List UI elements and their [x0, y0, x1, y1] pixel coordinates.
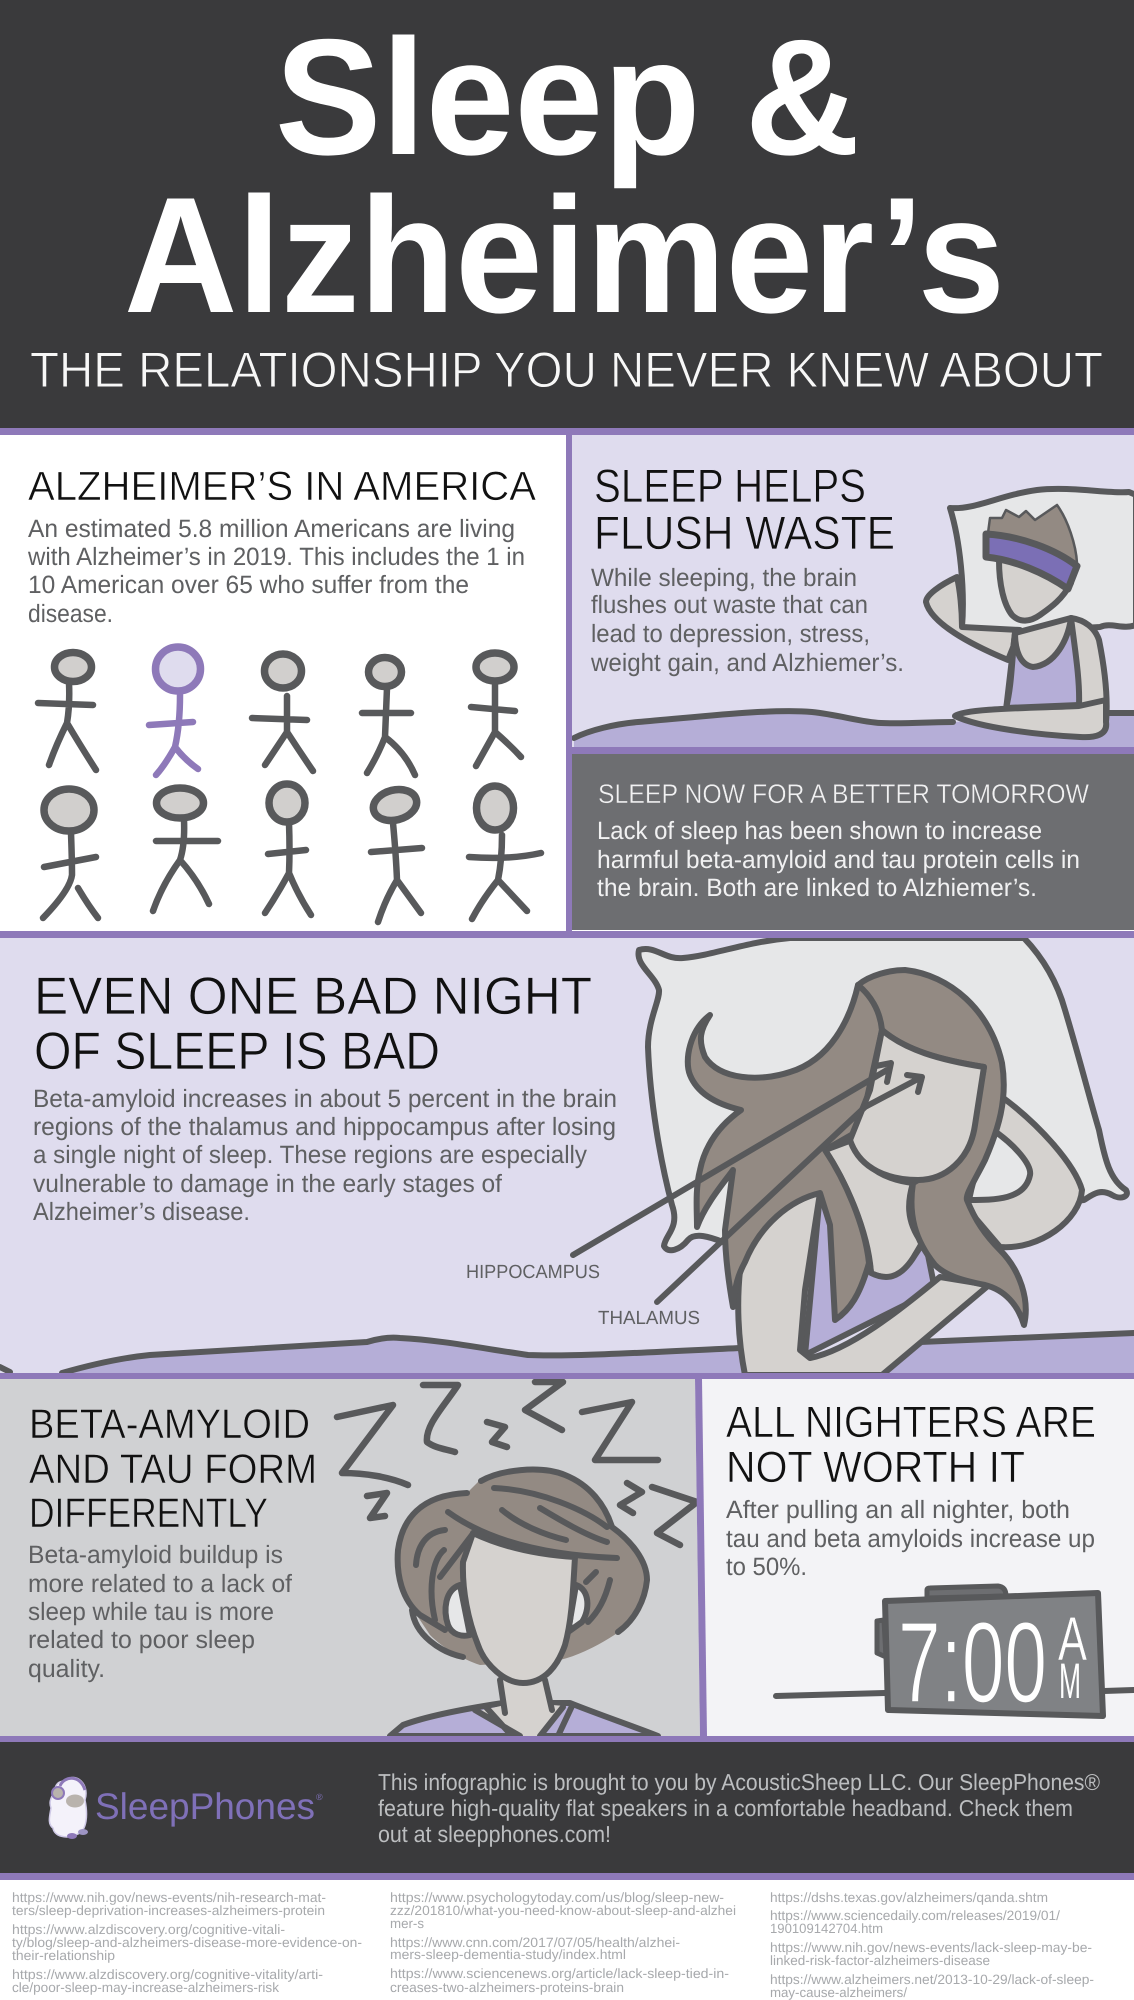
face: [850, 1030, 984, 1180]
text: buildup differences: more related to a lack of: [28, 1570, 292, 1598]
reference column 1: [12, 1890, 362, 1995]
text: beta-amyloid and tau: harmful beta-amyloid and tau protein cells in: [597, 846, 1080, 874]
heading: all nighters: NOT WORTH IT: [726, 1443, 1025, 1492]
figure 3: [252, 654, 313, 771]
figure 8: [265, 784, 311, 915]
text: all nighter increase: to 50%.: [726, 1553, 807, 1581]
illustration: sleepy woman with short hair: [390, 1470, 658, 1736]
text: waste flushing: lead to depression, stress,: [591, 620, 870, 648]
icon: ten stick figures, one in ten highlighted: [38, 647, 541, 922]
heading: even one bad night: [34, 967, 592, 1081]
panel: even one bad night: [0, 938, 1134, 1375]
clock time: A: [1058, 1605, 1087, 1674]
logo: SleepPhones sheep: [49, 1777, 88, 1839]
figure 2: highlighted purple: [149, 647, 200, 775]
panel: all nighters: [701, 1379, 1134, 1736]
icon: alarm clock: [776, 1586, 1134, 1727]
title: Sleep &: [275, 5, 860, 189]
reference column 2: https://www.sciencenews.org/article/lack-sleep-tied-in-: [390, 1966, 729, 1981]
text: beta-amyloid and tau: Lack of sleep has been shown to increase: [597, 817, 1042, 845]
heading: all nighters: [726, 1398, 1096, 1492]
text: sponsor message: [378, 1769, 1100, 1847]
title: Alzheimer’s: [124, 163, 1005, 347]
text: Alzheimer's statistic: 10 American over 65 who suffer from the: [28, 571, 469, 599]
reference column 1: https://www.nih.gov/news-events/nih-research-mat-: [12, 1890, 326, 1905]
reference column 3: may-cause-alzheimers/: [770, 1985, 907, 2000]
figure 1: [38, 652, 96, 770]
heading: sleep helps flush waste: SLEEP HELPS: [594, 459, 866, 512]
header panel: [0, 0, 1134, 429]
reference column 3: https://www.alzheimers.net/2013-10-29/lack-of-sleep-: [770, 1972, 1094, 1987]
shirt: [390, 1703, 658, 1736]
text: beta-amyloid and tau: the brain. Both are linked to Alzhiemer’s.: [597, 874, 1037, 902]
reference column 3: https://www.nih.gov/news-events/lack-sleep-may-be-: [770, 1940, 1092, 1955]
reference column 2: mers-sleep-dementia-study/index.html: [390, 1947, 626, 1962]
text: beta-amyloid increase: Beta-amyloid increases in about 5 percent in the brain: [33, 1085, 617, 1113]
illustration: sleeping woman with long hair: [573, 938, 1127, 1375]
arrow: hippocampus: [573, 1063, 891, 1255]
figure 9: [370, 785, 422, 922]
reference column 1: https://www.alzdiscovery.org/cognitive-vitali-: [12, 1922, 285, 1937]
arrow: thalamus: [657, 1075, 922, 1302]
reference column 1: cle/poor-sleep-may-increase-alzheimers-risk: [12, 1980, 279, 1995]
reference column 3: [770, 1890, 1094, 2000]
text: buildup differences: quality.: [28, 1655, 105, 1683]
figure 10: [469, 786, 541, 919]
text: sponsor message: feature high-quality flat speakers in a comfortable headband. Check them: [378, 1795, 1073, 1821]
hair: [398, 1470, 647, 1665]
text: all nighter increase: tau and beta amyloids increase up: [726, 1525, 1095, 1553]
reference column 1: ty/blog/sleep-and-alzheimers-disease-more-evidence-on-: [12, 1935, 362, 1950]
text: waste flushing: weight gain, and Alzhiemer’s.: [590, 649, 904, 677]
text: beta-amyloid increase: a single night of sleep. These regions are especially: [33, 1141, 587, 1169]
reference column 2: https://www.psychologytoday.com/us/blog/sleep-new-: [390, 1890, 724, 1905]
tank top: [1006, 618, 1079, 708]
reference column 3: https://dshs.texas.gov/alzheimers/qanda.shtm: [770, 1890, 1048, 1905]
reference column 1: https://www.alzdiscovery.org/cognitive-vitality/arti-: [12, 1967, 323, 1982]
heading: beta-amyloid and tau: DIFFERENTLY: [29, 1489, 268, 1536]
forearm: [955, 700, 1106, 737]
reference column 3: 190109142704.htm: [770, 1921, 883, 1936]
figure 4: [362, 658, 415, 775]
raised arm: [926, 577, 1020, 660]
text: waste flushing: While sleeping, the brain: [591, 564, 857, 592]
figure 7: [153, 788, 218, 911]
blanket: [12, 1333, 1134, 1373]
heading: beta-amyloid and tau: [29, 1400, 317, 1536]
text: buildup differences: Beta-amyloid buildup is: [28, 1541, 283, 1569]
reference column 3: https://www.sciencedaily.com/releases/2019/01/: [770, 1908, 1060, 1923]
panel: Alzheimer's in America: [0, 435, 566, 932]
face: [463, 1533, 575, 1683]
text: Alzheimer's statistic: disease.: [28, 600, 113, 628]
face: [999, 550, 1071, 621]
label: hippocampus: HIPPOCAMPUS: [466, 1262, 600, 1283]
hair strands: [416, 1488, 617, 1622]
reference column 2: zzz/201810/what-you-need-know-about-sleep-and-alzhei: [390, 1903, 736, 1918]
heading: all nighters: ALL NIGHTERS ARE: [726, 1398, 1096, 1447]
icon: Z letters: [337, 1382, 697, 1545]
reference column 3: linked-risk-factor-alzheimers-disease: [770, 1953, 990, 1968]
blanket: [574, 711, 1134, 747]
heading: sleep now: SLEEP NOW FOR A BETTER TOMORROW: [598, 779, 1089, 809]
text: beta-amyloid increase: vulnerable to damage in the early stages of: [33, 1170, 502, 1198]
label: thalamus: THALAMUS: [598, 1308, 700, 1329]
hair: [988, 505, 1077, 563]
text: buildup differences: [28, 1541, 292, 1683]
right hair: [858, 970, 1026, 1325]
text: buildup differences: related to poor sleep: [28, 1626, 255, 1654]
reference column 1: their-relationship: [12, 1948, 115, 1963]
left hair: [688, 985, 882, 1320]
text: all nighter increase: After pulling an all nighter, both: [726, 1496, 1070, 1524]
clock time: M: [1059, 1653, 1081, 1709]
top: [805, 1190, 935, 1355]
heading: even one bad night: EVEN ONE BAD NIGHT: [34, 967, 592, 1026]
pillow: [638, 938, 1127, 1250]
torso: [1006, 618, 1107, 730]
pillow: [950, 489, 1134, 632]
arm behind head: [960, 1097, 1082, 1247]
clock time: 7:00: [898, 1599, 1047, 1727]
text: Alzheimer's statistic: An estimated 5.8 million Americans are living: [28, 515, 515, 543]
panel: sleep now for a better tomorrow: [572, 754, 1134, 930]
heading: sleep helps flush waste: FLUSH WASTE: [594, 506, 895, 559]
panel: sleep helps flush waste: [572, 435, 1134, 747]
text: beta-amyloid increase: Alzheimer’s disease.: [33, 1198, 250, 1226]
text: Alzheimer's statistic: [27, 515, 525, 628]
illustration: sleeping man with headband: [574, 489, 1134, 747]
text: beta-amyloid increase: [33, 1085, 617, 1226]
title: [124, 5, 1005, 347]
reference column 1: ters/sleep-deprivation-increases-alzheimers-protein: [12, 1903, 325, 1918]
heading: beta-amyloid and tau: BETA-AMYLOID: [29, 1400, 310, 1447]
text: waste flushing: flushes out waste that can: [591, 591, 868, 619]
figure 5: [471, 653, 521, 766]
reference column 2: [390, 1890, 736, 1995]
figure 6: [43, 789, 98, 918]
neck: [475, 1675, 565, 1736]
text: beta-amyloid and tau: [597, 817, 1080, 902]
panel: beta-amyloid and tau: [0, 1379, 700, 1736]
subtitle: THE RELATIONSHIP YOU NEVER KNEW ABOUT: [30, 342, 1103, 398]
ears: [446, 1585, 470, 1636]
heading: Alzheimer's in America: ALZHEIMER’S IN AMERICA: [28, 463, 537, 509]
registered mark: ®: [316, 1792, 323, 1802]
text: beta-amyloid increase: regions of the thalamus and hippocampus after losing: [33, 1113, 616, 1141]
reference column 2: creases-two-alzheimers-proteins-brain: [390, 1980, 624, 1995]
heading: beta-amyloid and tau: AND TAU FORM: [29, 1445, 317, 1492]
text: Alzheimer's statistic: with Alzheimer’s in 2019. This includes the 1 in: [27, 543, 525, 571]
headband: [986, 534, 1077, 589]
front arm: [738, 1193, 989, 1375]
heading: even one bad night: OF SLEEP IS BAD: [34, 1022, 440, 1081]
text: buildup differences: sleep while tau is more: [28, 1598, 274, 1626]
heading: sleep helps flush waste: [594, 459, 895, 559]
text: all nighter increase: [726, 1496, 1095, 1581]
text: sponsor message: out at sleepphones.com!: [378, 1821, 611, 1847]
logo wordmark: SleepPhones: [95, 1786, 315, 1827]
references: [12, 1890, 1094, 2000]
reference column 2: https://www.cnn.com/2017/07/05/health/alzhei-: [390, 1935, 680, 1950]
chest: [825, 1140, 922, 1277]
footer panel: [0, 1742, 1134, 1874]
text: waste flushing: [590, 564, 904, 677]
reference column 2: mer-s: [390, 1916, 424, 1931]
